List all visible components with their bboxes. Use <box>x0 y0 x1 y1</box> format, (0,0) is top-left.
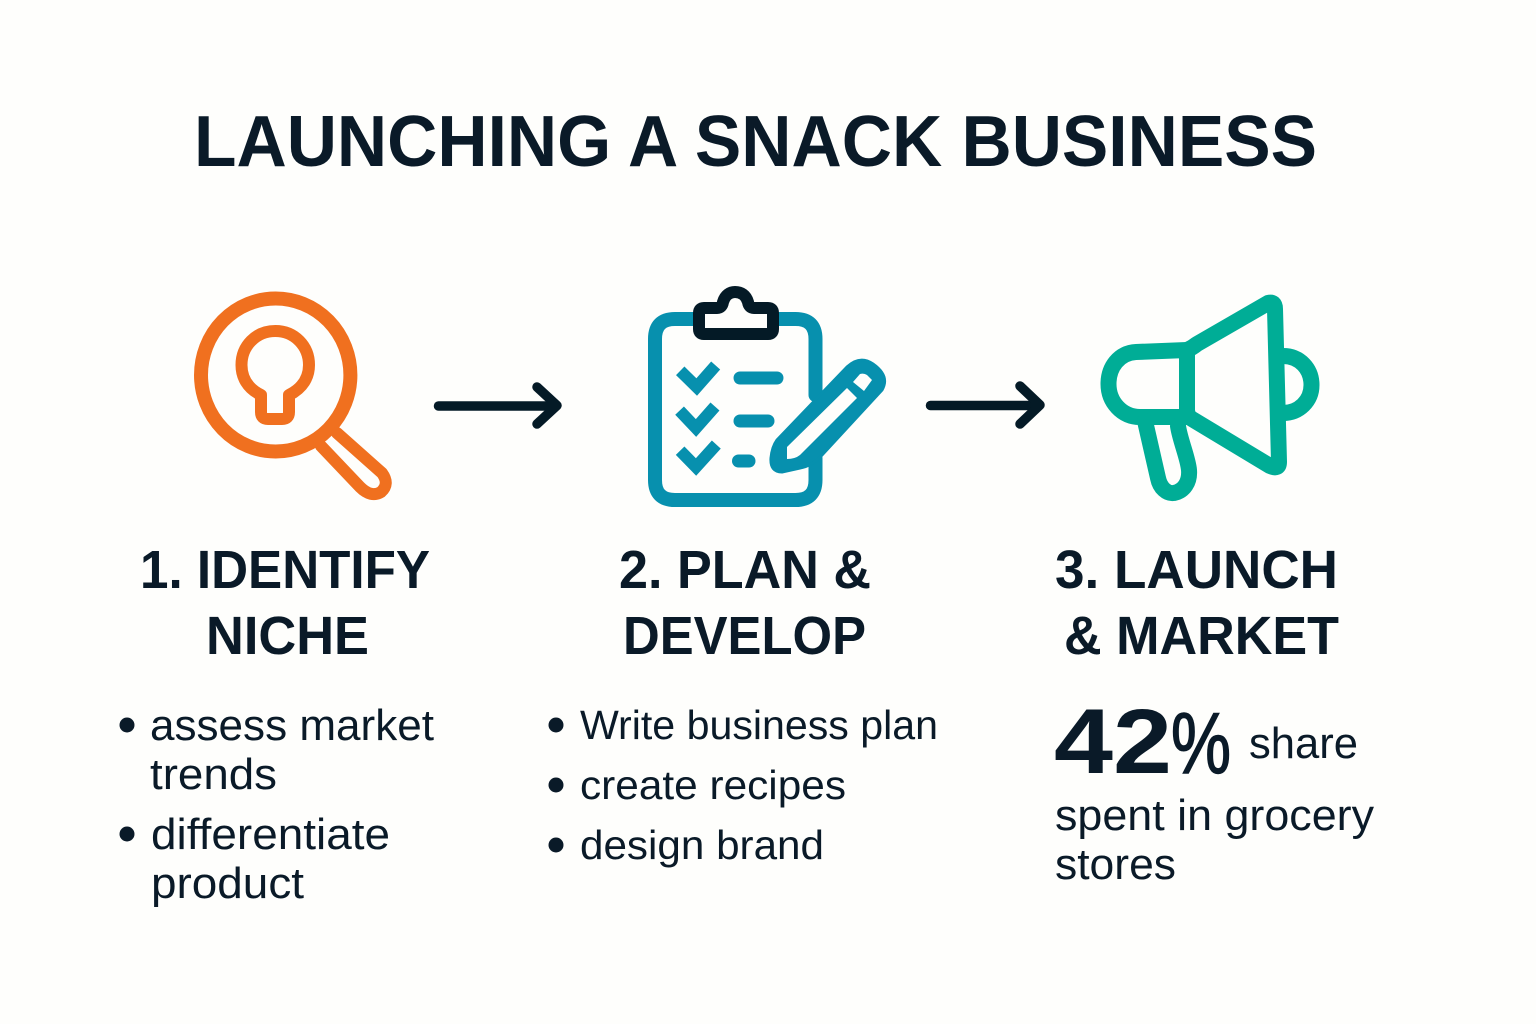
heading: step 1: NICHE <box>206 606 369 666</box>
bullet list: step 2: create recipes <box>580 762 846 808</box>
statistic: 42% share: % <box>1171 696 1231 792</box>
arrow: step 1 to step 2 <box>438 387 557 424</box>
stat description: stores <box>1055 840 1176 889</box>
icon: clipboard checklist with pencil <box>655 292 885 500</box>
statistic: 42% share: 42 <box>1054 691 1172 793</box>
title: LAUNCHING A SNACK BUSINESS <box>194 102 1317 182</box>
stat description: spent in grocery <box>1055 791 1374 840</box>
bullet list: step 1: assess market <box>150 701 434 750</box>
bullet list: step 2 <box>548 702 938 868</box>
bullet list: step 1: trends <box>150 750 277 799</box>
bullet list: step 1: differentiate <box>151 810 390 859</box>
stat description <box>1055 791 1374 889</box>
heading: step 1: 1. IDENTIFY <box>140 540 430 600</box>
arrow: step 2 to step 3 <box>930 386 1040 424</box>
bullet list: step 2: design brand <box>580 822 824 868</box>
icon: magnifying glass with light bulb <box>201 298 386 494</box>
bullet list: step 1 <box>120 701 434 908</box>
heading: step 3: & MARKET <box>1064 606 1339 666</box>
heading: step 2 <box>619 540 871 666</box>
statistic: 42% share: share <box>1249 719 1358 768</box>
heading: step 2: 2. PLAN & <box>619 540 871 600</box>
heading: step 3: 3. LAUNCH <box>1055 540 1338 600</box>
heading: step 2: DEVELOP <box>623 606 866 666</box>
heading: step 1 <box>140 540 430 666</box>
icon: megaphone <box>1108 303 1312 493</box>
statistic: 42% share <box>1054 691 1358 793</box>
bullet list: step 2: Write business plan <box>580 702 938 748</box>
bullet list: step 1: product <box>151 859 304 908</box>
heading: step 3 <box>1055 540 1339 666</box>
